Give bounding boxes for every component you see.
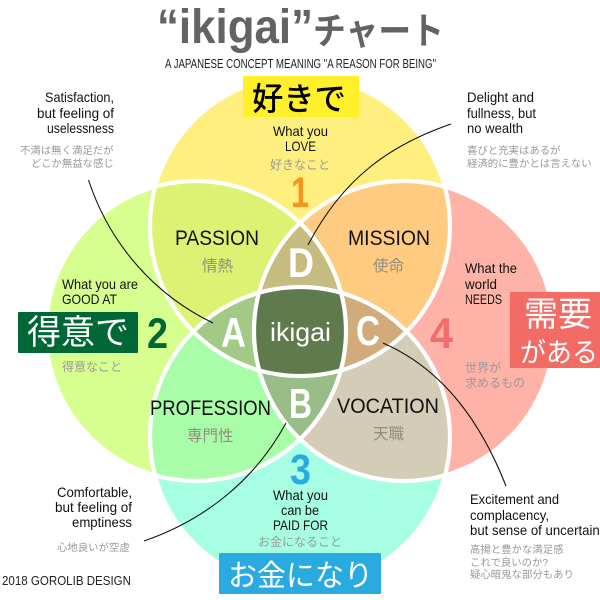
text: world needs: 求めるもの bbox=[465, 376, 525, 390]
label: love: 好きで bbox=[252, 81, 346, 117]
circle: love bbox=[150, 76, 450, 376]
vocation label bbox=[337, 395, 439, 443]
letter C: C bbox=[356, 307, 380, 354]
title bbox=[157, 1, 444, 54]
callout: D: fullness, but bbox=[467, 105, 536, 121]
callout: A: 不満は無く満足だが bbox=[20, 144, 114, 157]
callout: A: Satisfaction, bbox=[45, 89, 114, 105]
region: B bbox=[262, 373, 338, 436]
callout: D: 経済的に豊かとは言えない bbox=[467, 157, 592, 170]
callout: A: but feeling of bbox=[37, 105, 114, 121]
region: C bbox=[344, 296, 404, 368]
mission label: MISSION bbox=[348, 227, 430, 250]
text: world needs: NEEDS bbox=[465, 291, 502, 307]
label: good at: 得意で bbox=[27, 314, 129, 352]
callout: D: no wealth bbox=[467, 120, 523, 136]
text: what you are good at: GOOD AT bbox=[62, 291, 117, 307]
region: D bbox=[262, 226, 338, 290]
callout: C: complacency, bbox=[470, 507, 549, 523]
mission label: 使命 bbox=[373, 257, 405, 275]
passion label: PASSION bbox=[175, 227, 259, 250]
callout: B: Comfortable, bbox=[57, 484, 132, 500]
callout: D bbox=[467, 89, 592, 170]
subtitle: A JAPANESE CONCEPT MEANING "A REASON FOR BEING" bbox=[165, 57, 436, 71]
text: what you are good at: 得意なこと bbox=[62, 359, 122, 374]
text: world needs bbox=[464, 260, 525, 390]
text: paid for: PAID FOR bbox=[273, 517, 328, 533]
text: what you are good at: What you are bbox=[62, 276, 138, 292]
region: vocation bbox=[303, 334, 448, 479]
text: world needs: 世界が bbox=[465, 360, 501, 375]
circle: needs bbox=[254, 181, 554, 481]
text: what you love: What you bbox=[273, 123, 328, 139]
region: profession bbox=[152, 334, 297, 479]
leader lines bbox=[88, 124, 506, 541]
text: paid for: What you bbox=[273, 487, 328, 503]
callout: B bbox=[55, 484, 132, 554]
number 2: 2 bbox=[147, 310, 168, 358]
region: A bbox=[196, 296, 256, 368]
copyright: 2018 GOROLIB DESIGN bbox=[2, 574, 131, 588]
label: needs: がある bbox=[520, 338, 598, 368]
text: world needs: What the bbox=[465, 260, 517, 276]
callout: C bbox=[470, 491, 600, 581]
callout: B: but feeling of bbox=[55, 499, 132, 515]
mission label bbox=[348, 227, 430, 275]
text: what you are good at bbox=[62, 276, 138, 374]
label: needs bbox=[510, 292, 600, 368]
venn diagram bbox=[46, 76, 554, 587]
label: paid: お金になり bbox=[228, 560, 373, 593]
text: what you love: LOVE bbox=[285, 138, 316, 154]
callout: A: どこか無益な感じ bbox=[31, 157, 114, 170]
white circle outlines bbox=[46, 76, 554, 587]
title: “ikigai” bbox=[157, 1, 313, 54]
vocation label: VOCATION bbox=[337, 395, 439, 418]
text: paid for bbox=[258, 487, 342, 549]
region: ikigai centre bbox=[256, 289, 344, 374]
circle: paid for bbox=[150, 287, 450, 587]
passion label: 情熱 bbox=[202, 257, 234, 275]
text: paid for: can be bbox=[281, 502, 319, 518]
number 1: 1 bbox=[291, 169, 309, 217]
callout: B: emptiness bbox=[72, 514, 132, 530]
label: needs: 需要 bbox=[524, 296, 592, 334]
callout: D: Delight and bbox=[467, 89, 534, 105]
ikigai centre label: ikigai bbox=[270, 317, 331, 347]
callout: B: 心地良いが空虚 bbox=[57, 541, 130, 554]
title: チャート bbox=[313, 11, 444, 52]
region: passion bbox=[152, 183, 297, 328]
circle: good at bbox=[46, 181, 346, 481]
letter A: A bbox=[221, 309, 246, 356]
text: world needs: world bbox=[464, 276, 497, 292]
text: paid for: お金になること bbox=[258, 535, 342, 549]
letter B: B bbox=[289, 380, 312, 427]
profession label: 専門性 bbox=[187, 427, 234, 445]
profession label bbox=[150, 397, 271, 445]
text: what you love: 好きなこと bbox=[270, 158, 330, 172]
callout: C: これで良いのか? bbox=[470, 556, 548, 569]
letter D: D bbox=[288, 239, 314, 286]
region: mission bbox=[303, 183, 448, 328]
callout: C: Excitement and bbox=[470, 491, 559, 507]
callout: C: 疑心暗鬼な部分もあり bbox=[470, 568, 574, 581]
callout: A: uselessness bbox=[47, 120, 114, 136]
number 3: 3 bbox=[290, 446, 311, 494]
profession label: PROFESSION bbox=[150, 397, 271, 420]
text: what you love bbox=[270, 123, 330, 172]
region labels bbox=[150, 227, 439, 445]
callout: C: 高揚と豊かな満足感 bbox=[470, 543, 564, 556]
passion label bbox=[175, 227, 259, 275]
callout: D: 喜びと充実はあるが bbox=[467, 144, 561, 157]
vocation label: 天職 bbox=[373, 425, 405, 443]
number 4: 4 bbox=[430, 310, 453, 358]
callout: A bbox=[20, 89, 114, 170]
